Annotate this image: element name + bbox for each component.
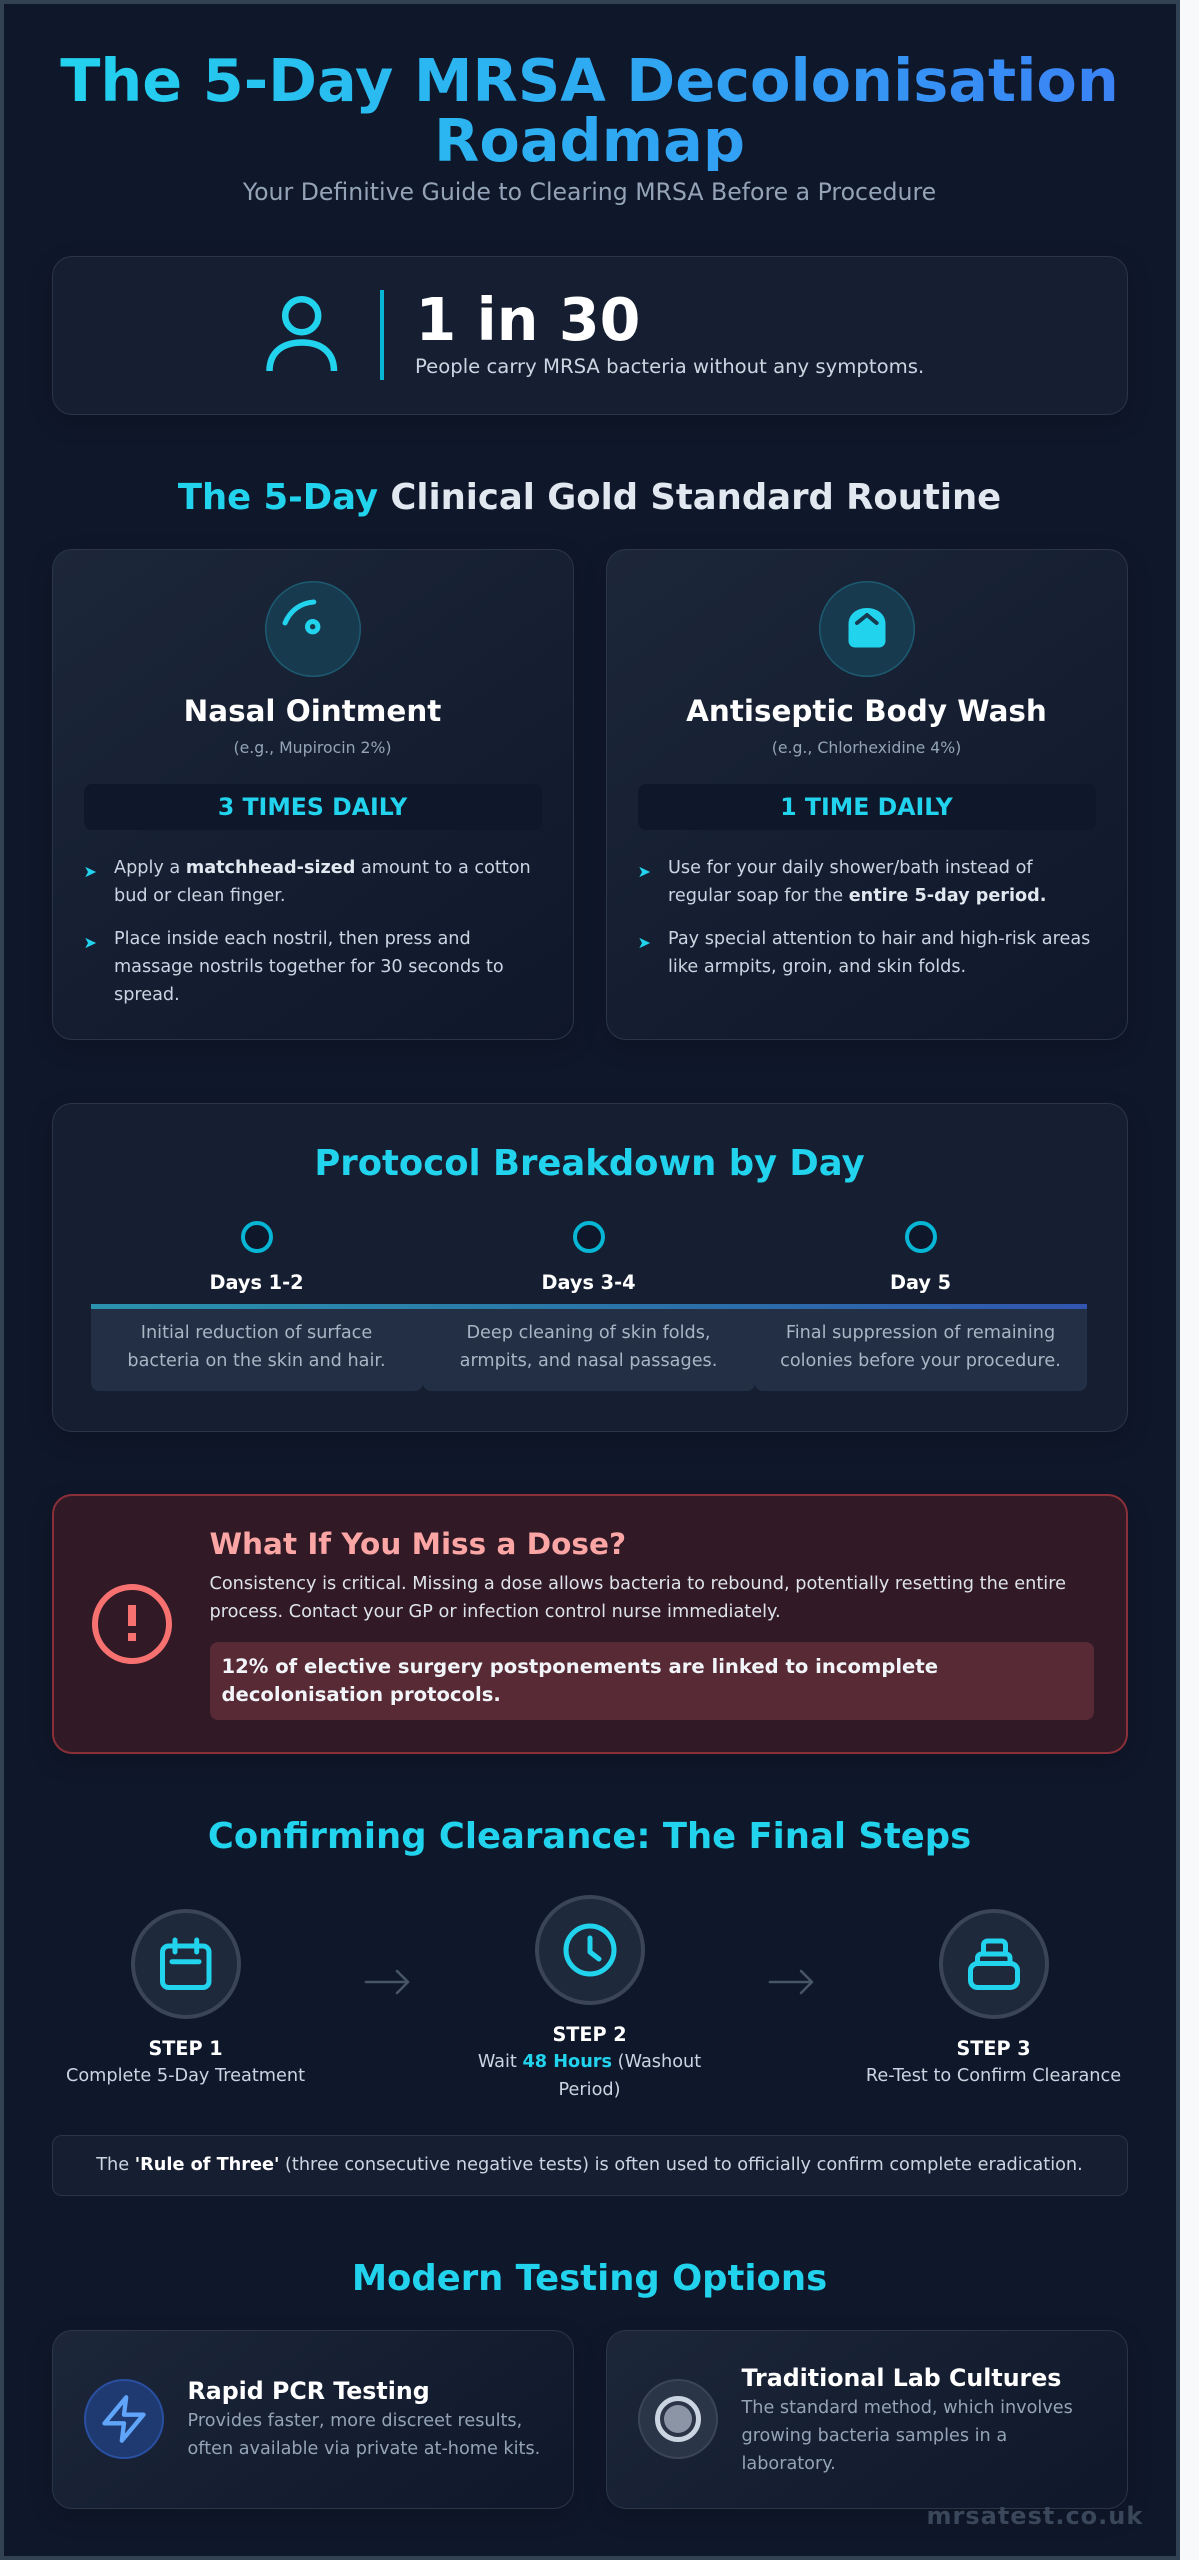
- instruction 2: Place inside each nostril, then press and: [114, 929, 471, 949]
- timeline step: days 3-4: Deep cleaning of skin folds,: [466, 1323, 711, 1343]
- stat number: 1 in 30: [416, 286, 640, 354]
- card subtitle: (e.g., Mupirocin 2%): [233, 738, 392, 756]
- step 3: Re-Test to Confirm Clearance: [866, 2066, 1121, 2086]
- heading: confirming clearance: Confirming Clearance: The Final Steps: [208, 1816, 971, 1857]
- icon: petri dish: [638, 2379, 718, 2459]
- card text: laboratory.: [742, 2454, 836, 2474]
- instruction 1: Use for your daily shower/bath instead of: [668, 858, 1033, 878]
- alert heading: What If You Miss a Dose?: [210, 1527, 626, 1561]
- icon: lightning bolt: [84, 2379, 164, 2459]
- card text: The standard method, which involves: [742, 2398, 1073, 2418]
- step 2: Period): [558, 2080, 621, 2100]
- alert statistic callout: decolonisation protocols.: [222, 1683, 501, 1706]
- alert statistic callout: 12% of elective surgery postponements are linked to incomplete: [222, 1655, 938, 1678]
- alert statistic callout: [210, 1642, 1094, 1720]
- title: Roadmap: [434, 106, 745, 175]
- step 1: [66, 1909, 305, 2086]
- card text: Provides faster, more discreet results,: [188, 2411, 522, 2431]
- callout: rule of three: The 'Rule of Three' (three consecutive negative tests) is often used to officially confirm complete eradication.: [96, 2155, 1083, 2175]
- timeline step: days 1-2: Initial reduction of surface: [141, 1323, 372, 1343]
- instruction 1: [668, 858, 1047, 906]
- panel: 1 in 30 statistic: [52, 256, 1128, 415]
- alert text: Consistency is critical. Missing a dose allows bacteria to rebound, potentially resetting the entire: [210, 1574, 1066, 1594]
- instruction 1: regular soap for the entire 5-day period.: [668, 886, 1047, 906]
- timeline step: days 3-4: armpits, and nasal passages.: [460, 1351, 717, 1371]
- step 3: [866, 1909, 1121, 2086]
- bullet arrow: ➤: [84, 862, 97, 881]
- frequency badge: [638, 784, 1096, 830]
- watermark: mrsatest.co.uk: [926, 2502, 1143, 2530]
- icon: clock: [534, 1895, 644, 2005]
- timeline step: day 5: Day 5: [890, 1271, 951, 1294]
- timeline step: day 5: Final suppression of remaining: [786, 1323, 1055, 1343]
- frequency badge: 1 TIME DAILY: [780, 793, 953, 821]
- card title: Antiseptic Body Wash: [686, 694, 1047, 728]
- timeline step: days 3-4: Days 3-4: [541, 1271, 636, 1294]
- icon: nose: [264, 581, 360, 677]
- panel: rapid PCR testing: [52, 2330, 574, 2509]
- step 2: [478, 1895, 701, 2100]
- icon: person: [266, 296, 338, 371]
- panel: antiseptic body wash: [606, 549, 1128, 1040]
- alert text: process. Contact your GP or infection control nurse immediately.: [210, 1602, 781, 1622]
- card text: growing bacteria samples in a: [742, 2426, 1007, 2446]
- panel: traditional lab cultures: [606, 2330, 1128, 2509]
- stat caption: People carry MRSA bacteria without any symptoms.: [415, 355, 924, 378]
- instruction 1: [114, 858, 531, 906]
- instruction 2: [114, 929, 504, 1005]
- frequency badge: 3 TIMES DAILY: [218, 793, 407, 821]
- timeline step: days 1-2: Days 1-2: [209, 1271, 304, 1294]
- frequency badge: [84, 784, 542, 830]
- instruction 1: bud or clean finger.: [114, 886, 285, 906]
- step 2: STEP 2: [552, 2023, 627, 2046]
- callout: rule of three: [52, 2135, 1128, 2196]
- card title: Rapid PCR Testing: [188, 2377, 430, 2405]
- timeline step: day 5: colonies before your procedure.: [780, 1351, 1061, 1371]
- alert text: [210, 1574, 1066, 1622]
- instruction 2: like armpits, groin, and skin folds.: [668, 957, 966, 977]
- heading: modern testing options: Modern Testing Options: [352, 2258, 827, 2299]
- card subtitle: (e.g., Chlorhexidine 4%): [772, 738, 961, 756]
- icon: warning: [92, 1584, 172, 1664]
- step 2: Wait 48 Hours (Washout: [478, 2052, 701, 2072]
- arrow: [768, 1970, 814, 1994]
- instruction 2: spread.: [114, 985, 180, 1005]
- title: The 5-Day MRSA Decolonisation: [60, 46, 1119, 115]
- bullet arrow: ➤: [638, 933, 651, 952]
- panel: protocol breakdown timeline: [52, 1103, 1128, 1432]
- icon: test kit: [938, 1909, 1048, 2019]
- divider bar: [380, 290, 384, 380]
- instruction 2: [668, 929, 1090, 977]
- timeline step: days 3-4: [423, 1221, 755, 1391]
- icon: soap: [818, 581, 914, 677]
- card text: [188, 2411, 540, 2459]
- step 1: STEP 1: [148, 2037, 223, 2060]
- icon: calendar: [130, 1909, 240, 2019]
- timeline step: days 1-2: bacteria on the skin and hair.: [127, 1351, 386, 1371]
- bullet arrow: ➤: [84, 933, 97, 952]
- timeline step: day 5: [755, 1221, 1087, 1391]
- subtitle: Your Definitive Guide to Clearing MRSA Before a Procedure: [243, 178, 936, 206]
- arrow: [364, 1970, 410, 1994]
- instruction 1: Apply a matchhead-sized amount to a cotton: [114, 858, 531, 878]
- card text: [741, 2398, 1073, 2474]
- step 3: STEP 3: [956, 2037, 1031, 2060]
- timeline step: days 1-2: [91, 1221, 423, 1391]
- title: [52, 51, 1128, 171]
- panel: nasal ointment: [52, 549, 574, 1040]
- heading: clinical gold standard routine: The 5-Day Clinical Gold Standard Routine: [178, 477, 1001, 518]
- panel: missed dose alert: [52, 1494, 1128, 1754]
- card title: Nasal Ointment: [184, 694, 441, 728]
- card text: often available via private at-home kits.: [188, 2439, 540, 2459]
- instruction 2: Pay special attention to hair and high-risk areas: [668, 929, 1090, 949]
- instruction 2: massage nostrils together for 30 seconds to: [114, 957, 504, 977]
- bullet arrow: ➤: [638, 862, 651, 881]
- step 1: Complete 5-Day Treatment: [66, 2066, 305, 2086]
- card title: Traditional Lab Cultures: [742, 2364, 1061, 2392]
- heading: protocol breakdown: Protocol Breakdown by Day: [314, 1143, 865, 1184]
